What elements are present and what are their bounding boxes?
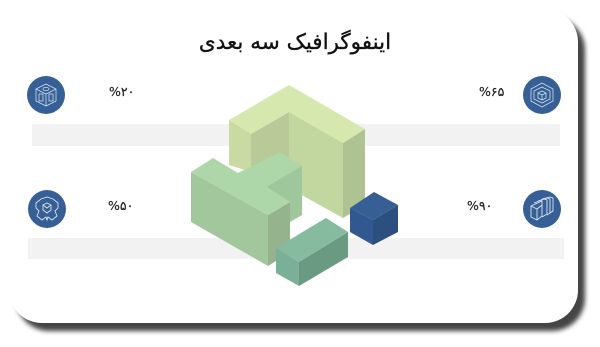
block: mid green T shape (191, 152, 302, 266)
percentage: 50: %۵۰ (108, 198, 133, 213)
icon: hexagon cube (523, 76, 561, 114)
icon: stacked layers (523, 190, 561, 228)
progress bar: top left and right track (32, 124, 560, 146)
title: اینفوگرافیک سه بعدی (199, 30, 391, 55)
icon: dice cube (27, 76, 65, 114)
percentage: 20: %۲۰ (109, 84, 134, 99)
progress bar: bottom track (28, 238, 564, 259)
block: teal cuboid (276, 218, 348, 286)
block: large pale green U shape (229, 85, 365, 218)
block: blue cube (350, 192, 398, 245)
percentage: 90: %۹۰ (467, 198, 492, 213)
percentage: 65: %۶۵ (479, 84, 504, 99)
icon: cube cluster (28, 190, 66, 228)
